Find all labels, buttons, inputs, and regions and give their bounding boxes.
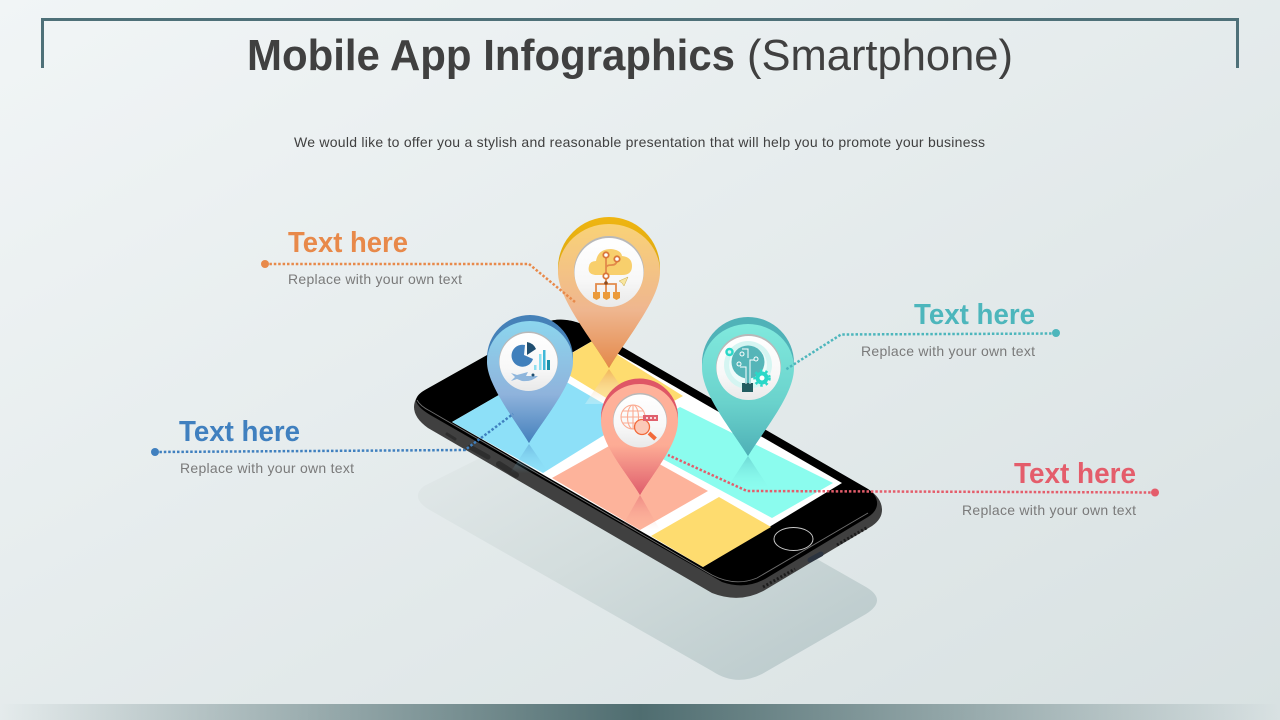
callout: blue: Text here (179, 416, 300, 448)
icon: cloud network (589, 249, 632, 300)
icon: pie chart with hand (511, 342, 550, 381)
phone screen (452, 340, 842, 567)
pin: teal bulb (702, 317, 794, 456)
callout: teal: Text here (914, 299, 1035, 331)
pin: red search (601, 378, 678, 495)
phone black face (416, 320, 877, 585)
bottom gradient band (0, 704, 1280, 720)
pin reflections (510, 369, 771, 530)
callout: red (668, 455, 1159, 518)
map tile: aqua (624, 407, 833, 518)
pin: blue chart (487, 315, 573, 443)
callout: red: Text here (1014, 458, 1136, 490)
home button (774, 528, 813, 550)
icon: globe search (621, 405, 658, 439)
callout: teal: Replace with your own text (861, 343, 1035, 359)
callout: blue: Replace with your own text (180, 460, 354, 476)
speaker dots and port (763, 527, 868, 587)
callout: red: Replace with your own text (962, 502, 1136, 518)
side buttons (447, 434, 516, 475)
phone shadow (418, 421, 877, 680)
map tile: salmon (552, 441, 708, 530)
pin: orange cloud (558, 217, 660, 368)
title: (Smartphone) (747, 31, 1013, 80)
map tile: blue (452, 369, 630, 473)
callout: orange: Text here (288, 227, 408, 259)
title bracket (42, 20, 1238, 68)
title: Mobile App Infographics (247, 31, 735, 80)
smartphone (414, 320, 882, 598)
phone body (414, 320, 882, 598)
callout: teal (785, 299, 1060, 370)
callout: blue (151, 414, 513, 476)
icon: light bulb (724, 341, 772, 392)
callout: orange (261, 227, 575, 302)
subtitle: We would like to offer you a stylish and reasonable presentation that will help you to promote your business (294, 134, 985, 150)
map tile: bottom yellow (651, 497, 771, 567)
map tile: top yellow (552, 340, 683, 419)
callout: orange: Replace with your own text (288, 271, 462, 287)
